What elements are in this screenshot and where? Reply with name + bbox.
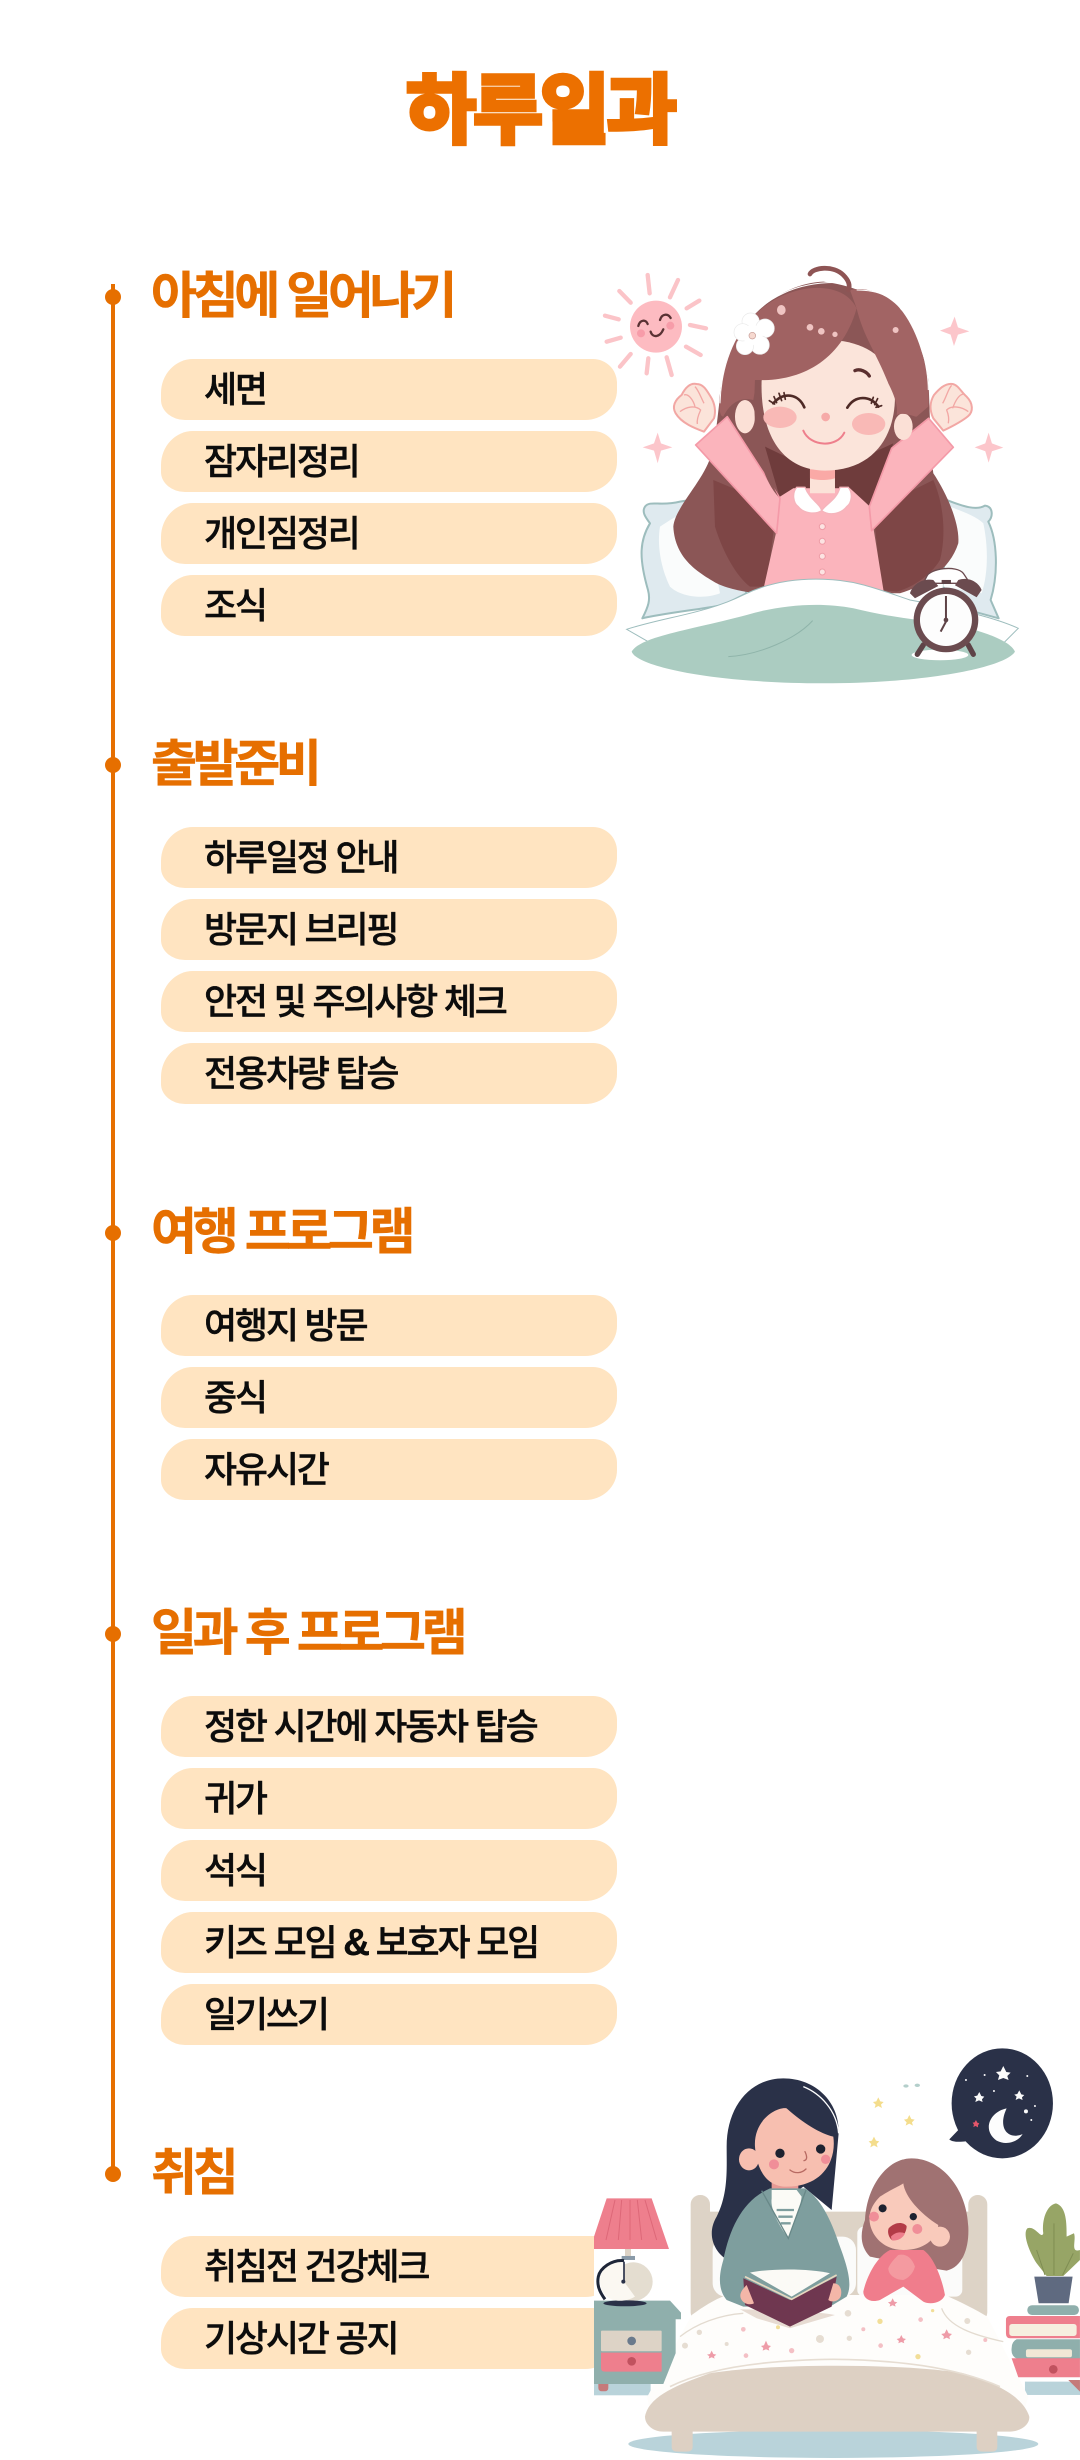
item (161, 1439, 617, 1500)
face features (769, 370, 882, 444)
mother sweater (720, 2188, 849, 2307)
neck shadow (765, 443, 893, 507)
mother neck (772, 2180, 798, 2207)
child hair (862, 2158, 968, 2271)
item (161, 359, 617, 420)
item (161, 503, 617, 564)
item: 중식 (204, 1377, 266, 1418)
heading: 아침에 일어나기 (151, 268, 453, 324)
heading: 여행 프로그램 (151, 1204, 411, 1260)
timeline dot (105, 1225, 121, 1241)
item (161, 575, 617, 636)
bed base (645, 2359, 1029, 2452)
item: 안전 및 주의사항 체크 (204, 981, 506, 1022)
item (161, 1367, 617, 1428)
item: 자유시간 (204, 1449, 328, 1490)
item: 잠자리정리 (204, 441, 359, 482)
item: 귀가 (204, 1778, 266, 1819)
item (161, 1840, 617, 1901)
icon: smiling sun (605, 275, 706, 375)
timeline dot (105, 1626, 121, 1642)
item: 석식 (204, 1850, 266, 1891)
neck (810, 467, 835, 493)
timeline dot (105, 289, 121, 305)
ears (735, 400, 755, 433)
mother face (739, 2087, 839, 2187)
section: 출발준비 (105, 736, 617, 1104)
item (161, 1043, 617, 1104)
section: 일과 후 프로그램 (105, 1605, 617, 2045)
item: 일기쓰기 (204, 1994, 328, 2035)
icon: flower hair clip (734, 313, 774, 355)
hair front bangs (719, 288, 857, 417)
plant (1026, 2203, 1080, 2315)
child pajama and hands (863, 2250, 945, 2303)
white blanket (627, 579, 1018, 660)
item: 방문지 브리핑 (204, 909, 397, 950)
girl back hair (673, 282, 958, 593)
mother hair (712, 2078, 839, 2258)
green blanket (632, 605, 1015, 683)
moon speech bubble (949, 2048, 1053, 2158)
item (161, 1696, 617, 1757)
timeline dot (105, 2166, 121, 2182)
section: 취침 (105, 2145, 594, 2369)
item (161, 1295, 617, 1356)
item (161, 971, 617, 1032)
nightstand (594, 2301, 681, 2391)
image background (594, 2063, 1080, 2460)
item: 세면 (204, 369, 266, 410)
section: 여행 프로그램 (105, 1204, 617, 1500)
hair shine (777, 305, 899, 337)
item: 키즈 모임 & 보호자 모임 (204, 1922, 538, 1963)
item: 취침전 건강체크 (204, 2246, 428, 2287)
item (161, 899, 617, 960)
face (762, 340, 895, 471)
lamp (594, 2198, 669, 2301)
item: 조식 (204, 585, 266, 626)
open book (740, 2269, 841, 2328)
headboard (691, 2195, 987, 2322)
section: 아침에 일어나기 (105, 268, 617, 636)
item (161, 2308, 617, 2369)
illustration: morning girl waking up (602, 266, 1019, 684)
item: 전용차량 탑승 (204, 1053, 397, 1094)
item (161, 2236, 617, 2297)
item (161, 1984, 617, 2045)
timeline line (111, 284, 115, 2176)
item: 여행지 방문 (204, 1305, 366, 1346)
item (161, 1912, 617, 1973)
title: 하루일과 (406, 69, 674, 154)
pajama arms (696, 417, 953, 533)
collar (794, 487, 851, 514)
pillow (642, 498, 999, 618)
item (161, 827, 617, 888)
pillows (713, 2227, 962, 2297)
bedside clock (598, 2261, 647, 2306)
stacked books (1006, 2316, 1080, 2392)
item: 하루일정 안내 (204, 837, 397, 878)
floor shadow (594, 2382, 1080, 2458)
heading: 출발준비 (151, 736, 317, 792)
icon: alarm clock (910, 568, 982, 660)
heading: 일과 후 프로그램 (151, 1605, 463, 1661)
item: 기상시간 공지 (204, 2318, 397, 2359)
blanket pattern (680, 2298, 1003, 2359)
icon: sparkles (643, 317, 1003, 463)
timeline dot (105, 757, 121, 773)
item (161, 431, 617, 492)
buttons (819, 524, 825, 575)
pajama body (764, 488, 884, 593)
blanket (647, 2295, 1028, 2413)
child face (869, 2183, 950, 2250)
floating stars and notes (869, 2084, 920, 2147)
heading: 취침 (151, 2145, 234, 2201)
raised fists (674, 384, 972, 432)
item: 정한 시간에 자동차 탑승 (204, 1706, 537, 1747)
item (161, 1768, 617, 1829)
item: 개인짐정리 (204, 513, 359, 554)
